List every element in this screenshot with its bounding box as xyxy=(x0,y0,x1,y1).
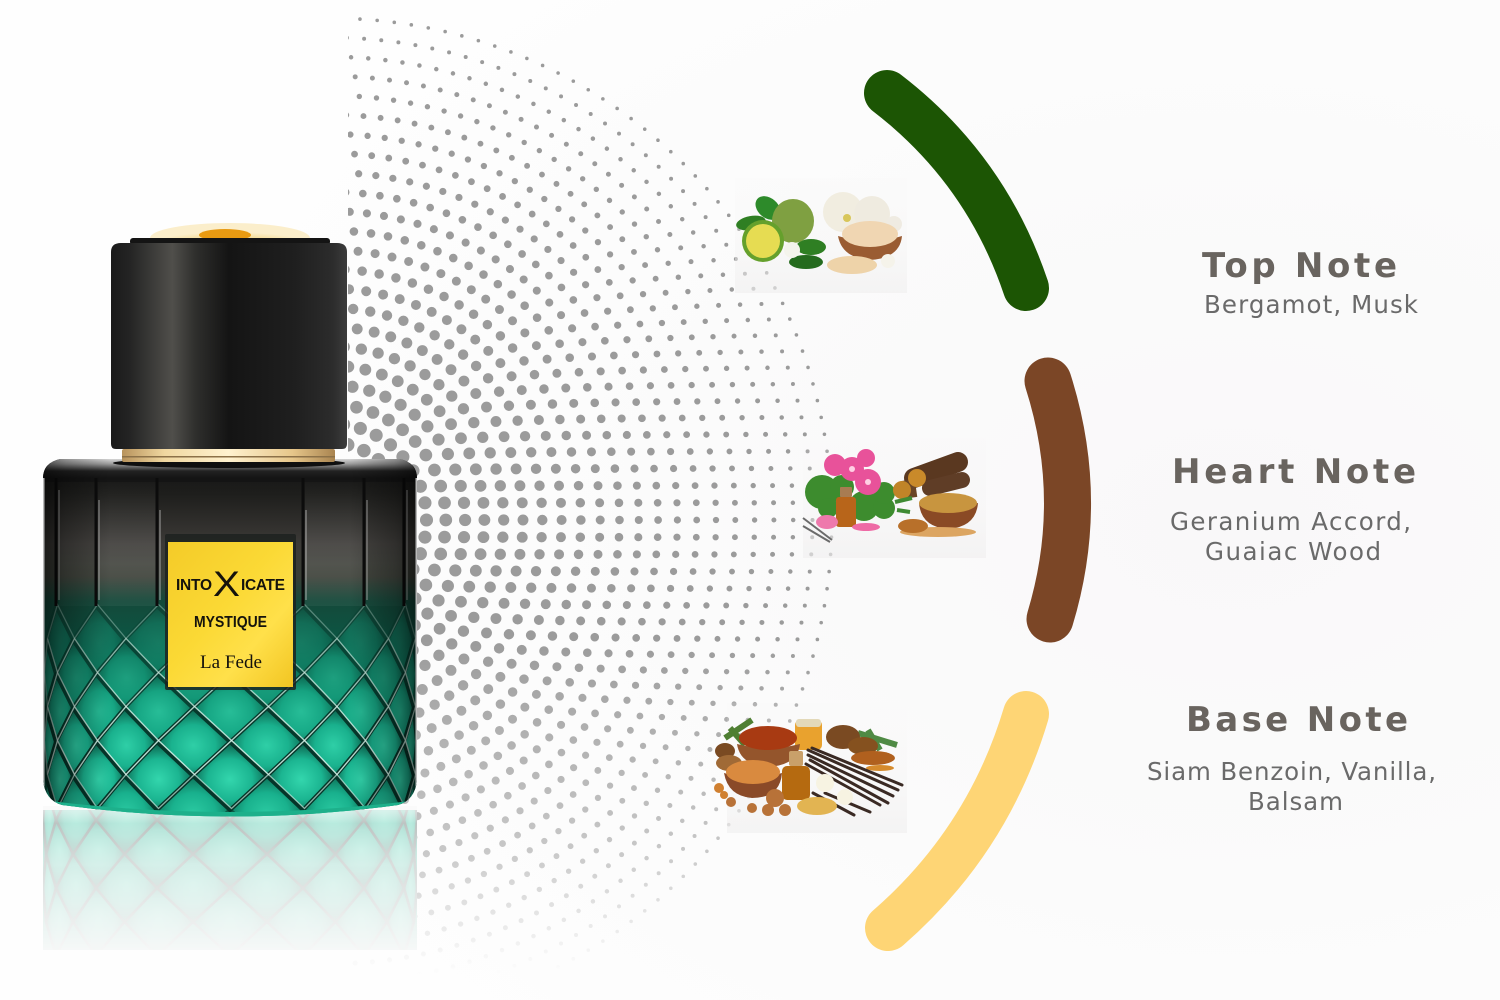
heart note ingredients: Guaiac Wood xyxy=(1205,537,1381,566)
heart note heading: Heart Note xyxy=(1172,452,1416,492)
brand name xyxy=(176,565,285,631)
brand name: INTO xyxy=(176,577,212,594)
perfume bottle xyxy=(43,223,418,956)
base note ingredients xyxy=(1147,757,1436,816)
base note heading: Base Note xyxy=(1186,700,1408,740)
lattice highlights xyxy=(44,604,418,808)
gold collar xyxy=(113,449,345,468)
base note ingredients: Balsam xyxy=(1248,787,1343,816)
base note ingredients image xyxy=(714,703,907,833)
gold label xyxy=(168,542,293,687)
heart note ingredients: Geranium Accord, xyxy=(1170,507,1411,536)
heart note ingredients xyxy=(1170,507,1411,566)
brand name: ICATE xyxy=(241,577,285,594)
glass base band xyxy=(54,802,406,816)
brand name: X xyxy=(213,565,240,604)
bottle reflection xyxy=(43,806,417,950)
cap top ring xyxy=(130,238,330,245)
brand name: MYSTIQUE xyxy=(194,614,267,631)
top note heading: Top Note xyxy=(1202,246,1397,286)
black cap xyxy=(111,243,347,449)
halftone dot fan xyxy=(330,18,832,990)
top note arc xyxy=(887,93,1026,288)
label frame xyxy=(165,534,296,690)
top note ingredients: Bergamot, Musk xyxy=(1204,290,1419,319)
base note arc xyxy=(888,714,1026,928)
maker name: La Fede xyxy=(200,652,262,673)
top note ingredients image xyxy=(735,178,907,293)
shoulder highlight xyxy=(43,459,417,482)
glass body xyxy=(43,459,418,844)
diamond cut lattice xyxy=(44,610,416,816)
upper panels xyxy=(43,459,417,820)
base note ingredients: Siam Benzoin, Vanilla, xyxy=(1147,757,1436,786)
gold dome on cap xyxy=(150,223,310,253)
heart note arc xyxy=(1048,381,1068,619)
heart note ingredients image xyxy=(803,438,986,558)
